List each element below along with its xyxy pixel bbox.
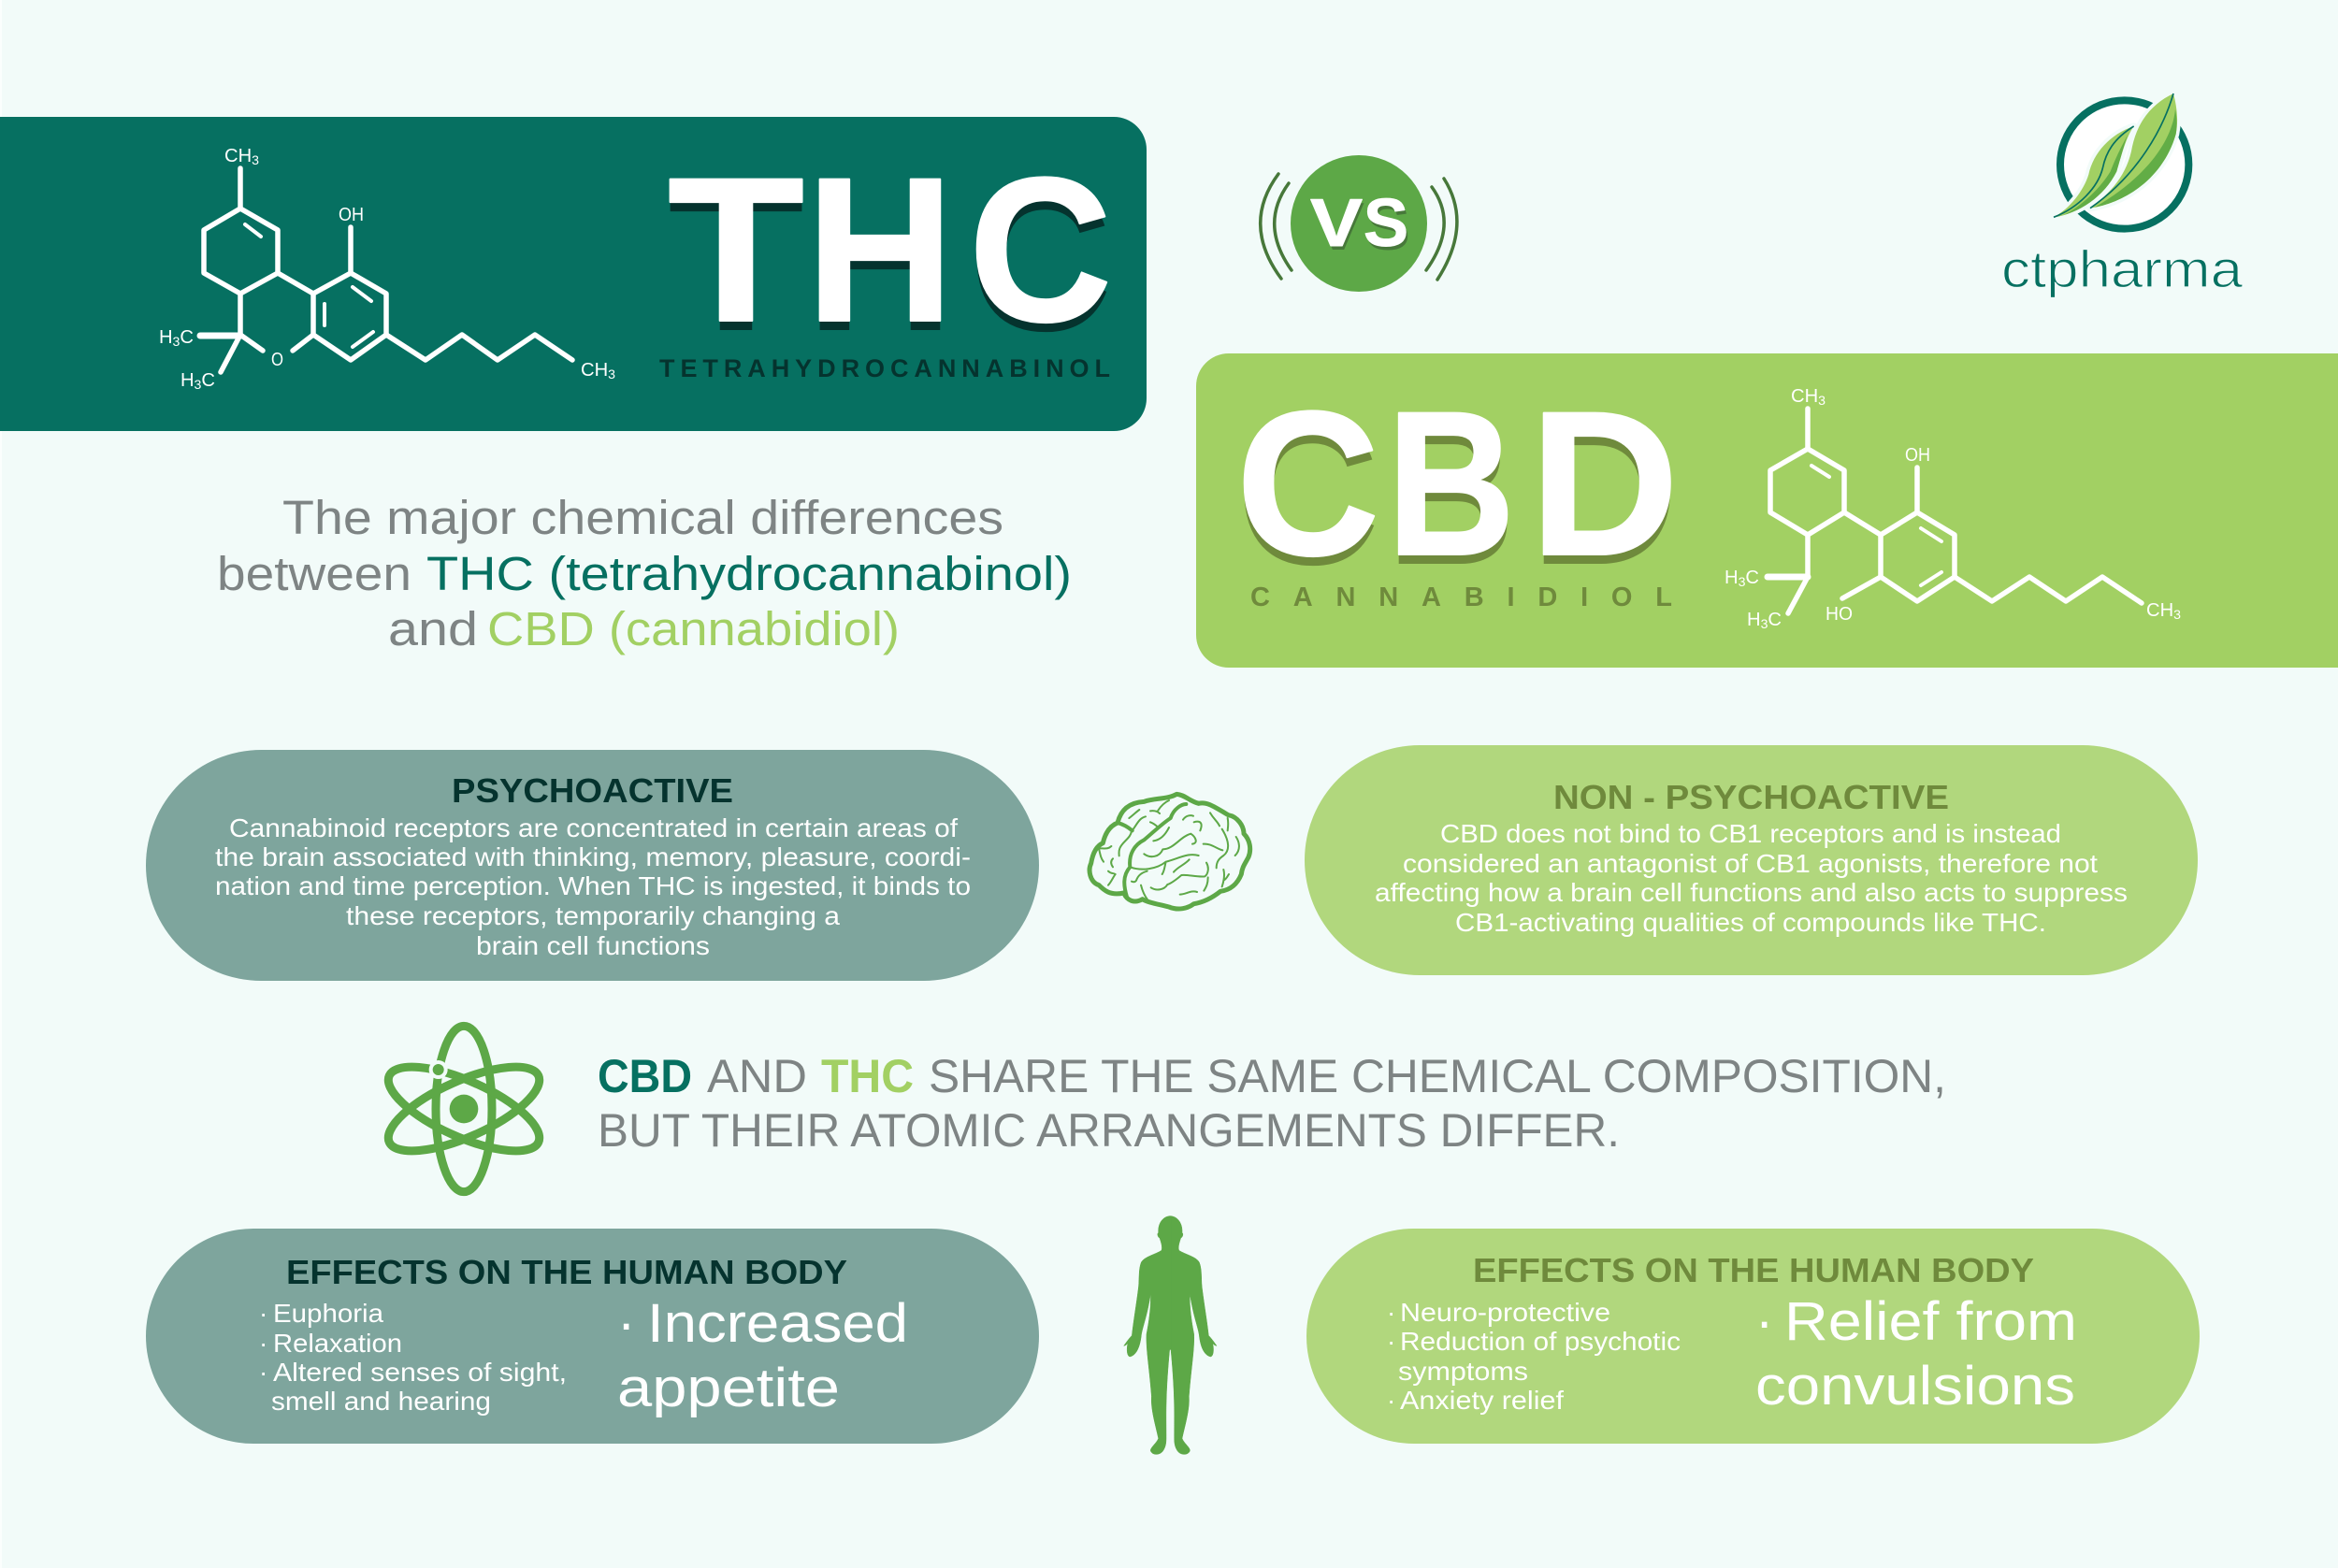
icon: VS badge: V [1310, 186, 1363, 261]
statement: shared chemical composition: CBD [598, 1050, 692, 1102]
psychoactive body text: the brain associated with thinking, memory, pleasure, coordi- [215, 842, 971, 871]
CBD molecule diagram [1725, 386, 2181, 631]
CBD molecule diagram: 3 [1761, 616, 1768, 631]
logo: ctpharma [2001, 94, 2244, 298]
THC effects list: Euphoria [273, 1299, 383, 1328]
statement: shared chemical composition: BUT THEIR ATOMIC ARRANGEMENTS DIFFER. [598, 1104, 1620, 1157]
CBD molecule diagram: CH [1791, 386, 1818, 407]
psychoactive body text: nation and time perception. When THC is ingested, it binds to [215, 871, 971, 900]
THC molecule diagram: C [201, 370, 215, 391]
THC effects list: · [259, 1299, 267, 1328]
THC effects heading: EFFECTS ON THE HUMAN BODY [286, 1253, 847, 1291]
THC molecule diagram: H [159, 327, 172, 348]
headline: THC (tetrahydrocannabinol) [426, 547, 1072, 600]
psychoactive body text [215, 813, 971, 960]
THC title: H [806, 144, 954, 374]
CBD molecule diagram: H [1747, 610, 1760, 630]
THC effects list: Relaxation [273, 1329, 402, 1358]
THC key effect: appetite [617, 1358, 840, 1418]
THC molecule diagram: 3 [608, 367, 615, 381]
CBD molecule diagram: 3 [1818, 393, 1826, 408]
THC molecule diagram [159, 146, 615, 392]
THC molecule diagram: CH [581, 360, 608, 381]
THC molecule diagram: OH [339, 205, 364, 225]
logo mark: ring and leaves [2054, 94, 2188, 229]
THC molecule diagram: O [271, 350, 283, 370]
CBD effects list: · [1387, 1386, 1395, 1415]
CBD effects list: Neuro-protective [1400, 1298, 1610, 1327]
THC title: T [668, 135, 804, 365]
statement: shared chemical composition: THC [821, 1050, 914, 1102]
panel: CBD effects on the human body [1306, 1229, 2200, 1444]
psychoactive body text: these receptors, temporarily changing a [346, 901, 840, 930]
THC molecule diagram: CH [224, 146, 252, 166]
THC effects list: · [259, 1329, 267, 1358]
CBD title: D [1530, 368, 1679, 598]
CBD molecule diagram: H [1725, 568, 1738, 588]
headline [217, 491, 1072, 655]
headline: CBD (cannabidiol) [487, 602, 900, 655]
icon: VS badge [1261, 155, 1457, 292]
CBD effects list: · [1387, 1298, 1395, 1327]
psychoactive heading: PSYCHOACTIVE [452, 771, 733, 810]
headline: between [217, 547, 411, 600]
CBD molecule diagram: C [1745, 568, 1759, 588]
CBD title: D [1530, 378, 1679, 608]
CBD effects heading: EFFECTS ON THE HUMAN BODY [1473, 1251, 2034, 1289]
statement: shared chemical composition: SHARE THE SAME CHEMICAL COMPOSITION, [929, 1050, 1946, 1102]
statement: shared chemical composition: AND [707, 1050, 807, 1102]
CBD title: C [1236, 378, 1379, 608]
non-psychoactive body text: considered an antagonist of CB1 agonists, therefore not [1403, 849, 2098, 878]
CBD molecule diagram: HO [1826, 604, 1853, 625]
CBD title: B [1387, 368, 1515, 598]
THC molecule diagram: C [180, 327, 194, 348]
non-psychoactive body text: CB1-activating qualities of compounds like THC. [1455, 908, 2046, 937]
non-psychoactive heading: NON - PSYCHOACTIVE [1553, 778, 1949, 816]
icon: VS badge: S [1364, 186, 1408, 261]
CBD key effect: · [1755, 1291, 1773, 1352]
THC key effect [617, 1293, 908, 1418]
CBD title: B [1387, 378, 1515, 608]
non-psychoactive body text: CBD does not bind to CB1 receptors and is instead [1440, 819, 2061, 848]
CBD effects list: symptoms [1398, 1357, 1528, 1386]
panel: THC header [0, 117, 1147, 431]
THC molecule diagram: H [180, 370, 194, 391]
icon: human body [1124, 1216, 1217, 1454]
CBD effects list: Reduction of psychotic [1400, 1327, 1681, 1356]
CBD molecule diagram: OH [1905, 445, 1930, 466]
THC molecule diagram: 3 [252, 152, 259, 167]
CBD molecule diagram: CH [2146, 600, 2173, 621]
headline: and [388, 602, 478, 655]
THC title: T [668, 144, 804, 374]
panel: CBD header [1196, 353, 2338, 668]
panel: non-psychoactive [1305, 745, 2198, 975]
THC molecule diagram: 3 [173, 334, 180, 349]
CBD molecule diagram: 3 [1739, 574, 1746, 589]
CBD title: C [1236, 368, 1379, 598]
THC full name: TETRAHYDROCANNABINOL [659, 354, 1110, 382]
CBD key effect: convulsions [1755, 1356, 2075, 1417]
non-psychoactive body text [1375, 819, 2128, 937]
CBD key effect: Relief from [1784, 1291, 2077, 1352]
CBD effects list: Anxiety relief [1400, 1386, 1564, 1415]
THC title: C [969, 135, 1112, 365]
icon: atom [378, 1026, 550, 1192]
THC key effect: Increased [647, 1293, 908, 1354]
panel: psychoactive [146, 750, 1039, 981]
statement: shared chemical composition [598, 1050, 1946, 1157]
logo wordmark: ctpharma [2001, 239, 2244, 298]
icon: VS badge: S [1365, 190, 1410, 265]
THC effects list: smell and hearing [271, 1387, 491, 1416]
THC effects list: · [259, 1358, 267, 1387]
THC effects list [259, 1299, 567, 1416]
CBD full name: CANNABIDIOL [1250, 583, 1672, 612]
psychoactive body text: Cannabinoid receptors are concentrated in certain areas of [229, 813, 958, 842]
THC molecule diagram: 3 [195, 377, 202, 392]
CBD molecule diagram: C [1768, 610, 1782, 630]
CBD title [1236, 368, 1679, 608]
THC title [668, 135, 1112, 374]
CBD effects list [1387, 1298, 1681, 1415]
CBD molecule diagram: 3 [2173, 607, 2181, 622]
non-psychoactive body text: affecting how a brain cell functions and also acts to suppress [1375, 878, 2128, 907]
panel: THC effects on the human body [146, 1229, 1039, 1444]
CBD effects list: · [1387, 1327, 1395, 1356]
psychoactive body text: brain cell functions [476, 931, 710, 960]
headline: The major chemical differences [282, 491, 1003, 544]
THC effects list: Altered senses of sight, [273, 1358, 567, 1387]
THC key effect: · [617, 1293, 635, 1354]
icon: brain [1090, 794, 1250, 909]
CBD key effect [1755, 1291, 2077, 1417]
THC title: C [969, 144, 1112, 374]
THC title: H [806, 135, 954, 365]
icon: VS badge: V [1312, 190, 1364, 265]
